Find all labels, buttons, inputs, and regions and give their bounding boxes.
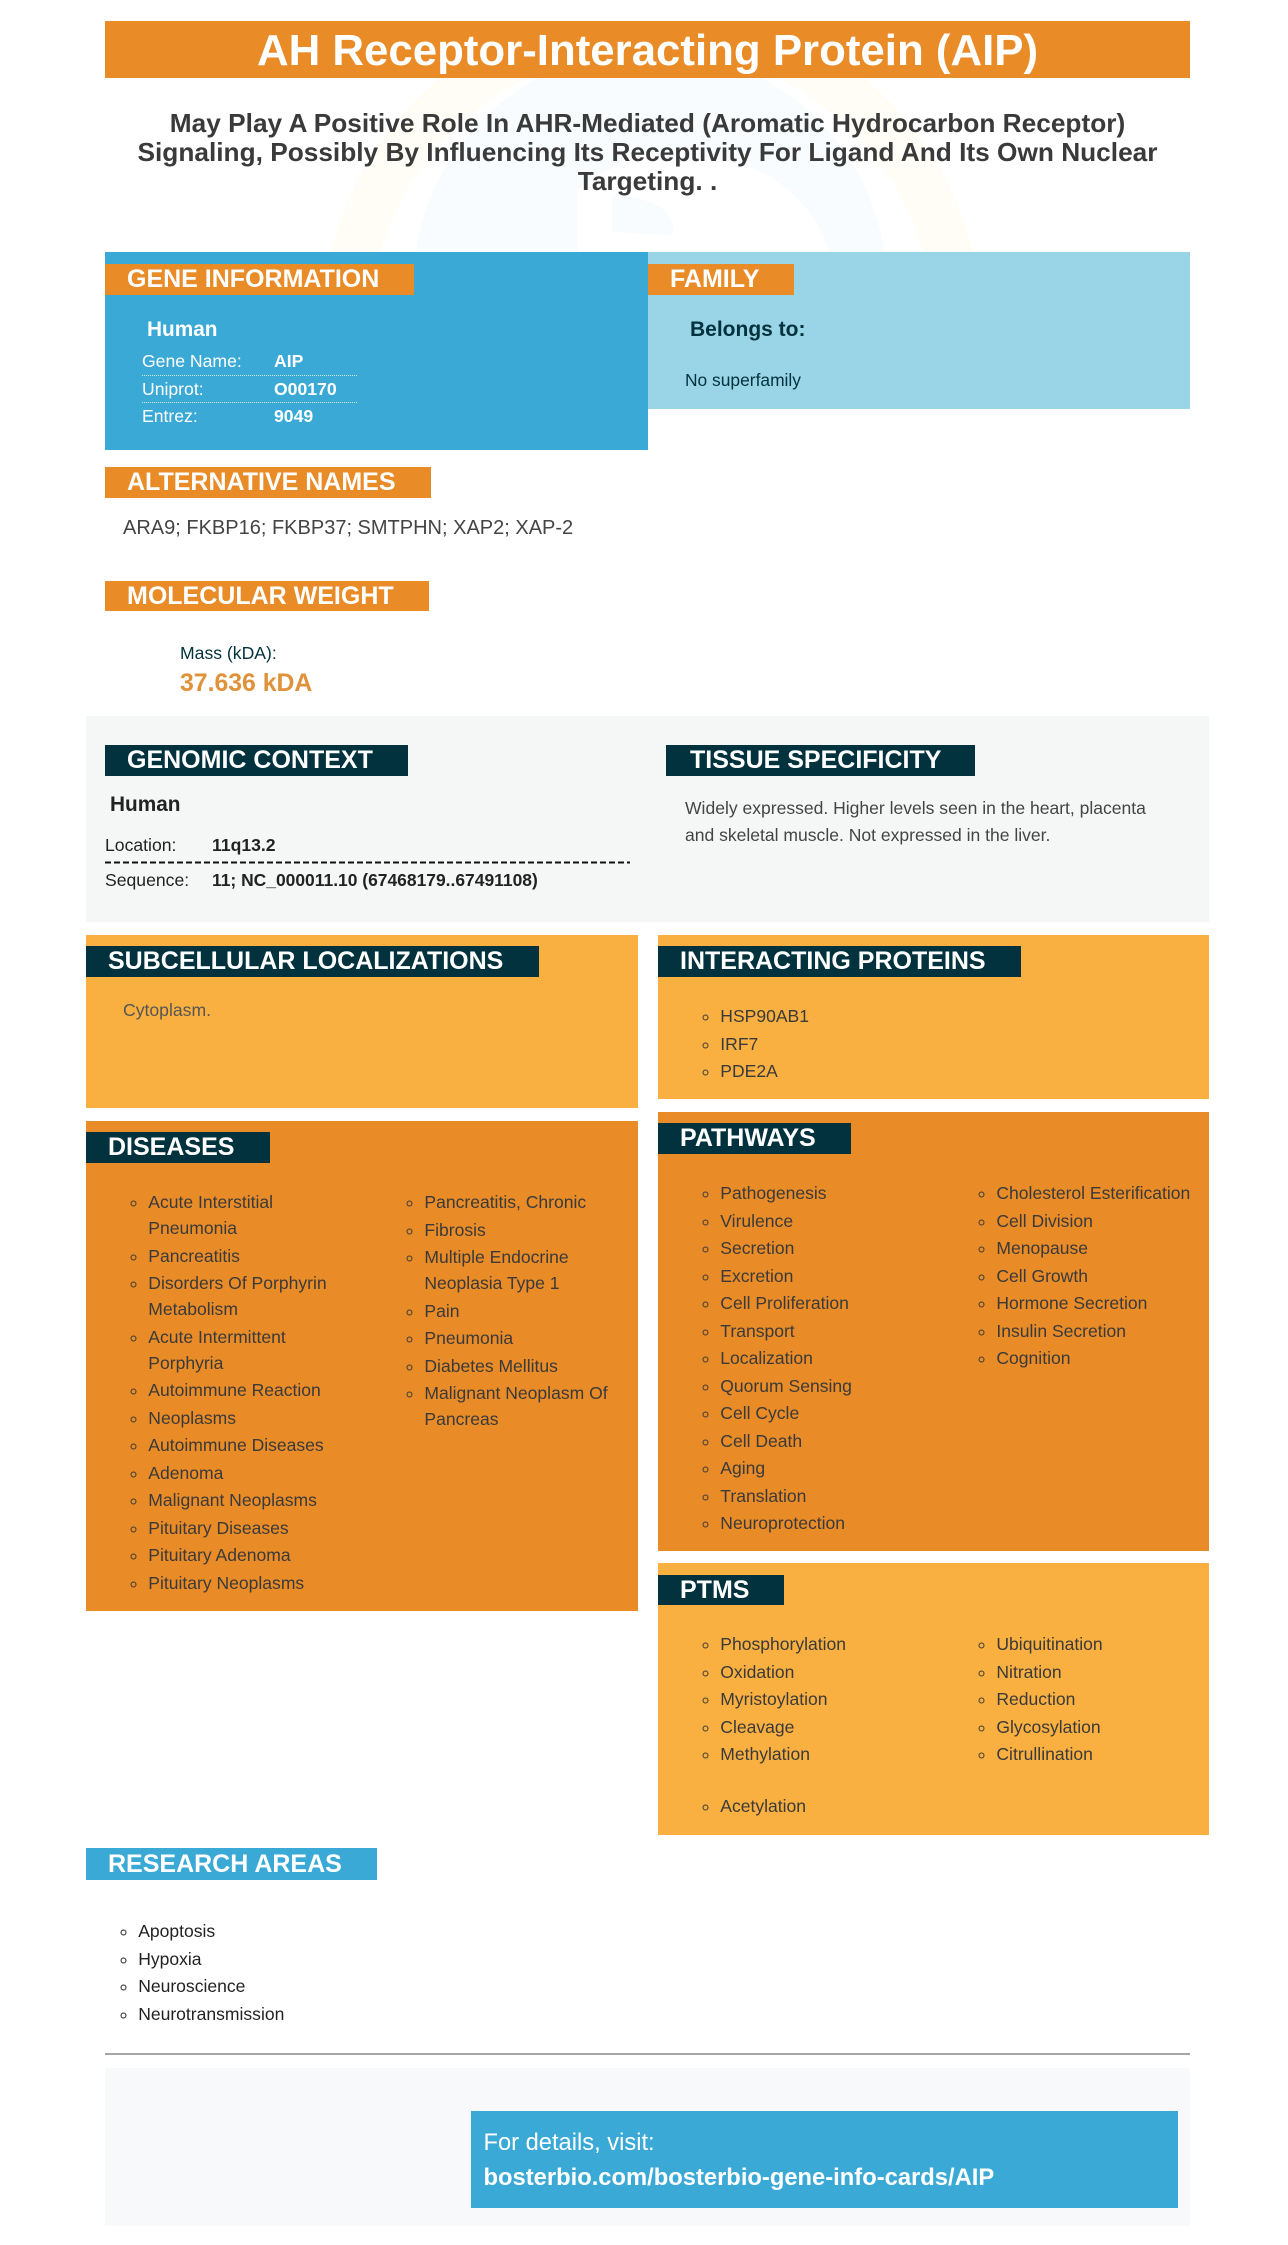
pathways list column 1: Localization	[720, 1348, 813, 1368]
tissue specificity text	[685, 798, 1146, 845]
entrez row: Entrez:	[142, 406, 198, 426]
pathways list column 2: Menopause	[996, 1238, 1088, 1258]
diseases list column 1: Pituitary Neoplasms	[148, 1572, 304, 1592]
ptms list column 1: Myristoylation	[720, 1689, 827, 1709]
ptms list column 2: Nitration	[996, 1662, 1062, 1682]
research areas list: Neuroscience	[138, 1976, 245, 1996]
diseases list column 2: Diabetes Mellitus	[424, 1356, 558, 1376]
panel: diseases	[86, 1121, 638, 1611]
heading: research areas: RESEARCH AREAS	[108, 1850, 342, 1878]
diseases list column 2: Malignant Neoplasm Of	[424, 1383, 608, 1403]
uniprot row: Uniprot:	[142, 379, 204, 399]
ptms list column 1	[702, 1634, 846, 1816]
mass value: 37.636 kDA	[180, 670, 312, 697]
gene name row: AIP	[274, 351, 303, 371]
interacting proteins list: HSP90AB1	[720, 1006, 809, 1026]
ptms list column 1: Oxidation	[720, 1662, 794, 1682]
location row: 11q13.2	[212, 835, 276, 855]
panel: alternative names	[105, 467, 573, 539]
heading: diseases: DISEASES	[108, 1133, 234, 1161]
uniprot row	[142, 376, 357, 403]
pathways list column 2	[978, 1183, 1190, 1368]
ptms list column 2: Reduction	[996, 1689, 1075, 1709]
callout url: bosterbio.com/bosterbio-gene-info-cards/AIP	[484, 2164, 994, 2190]
heading: pathways	[658, 1123, 851, 1154]
alternative names list: ARA9; FKBP16; FKBP37; SMTPHN; XAP2; XAP-2	[123, 517, 573, 539]
heading: pathways: PATHWAYS	[680, 1124, 816, 1152]
panel: research areas	[86, 1848, 377, 2024]
diseases list column 1: Autoimmune Reaction	[148, 1380, 321, 1400]
panel: subcellular localizations	[86, 935, 638, 1108]
panel: molecular weight	[105, 581, 429, 697]
diseases list column 1: Adenoma	[148, 1462, 223, 1482]
subtitle description: May Play A Positive Role In AHR-Mediated (Aromatic Hydrocarbon Receptor)	[170, 108, 1125, 138]
ptms list column 2: Citrullination	[996, 1744, 1093, 1764]
ptms list column 2: Ubiquitination	[996, 1634, 1103, 1654]
background watermark logo	[331, 78, 973, 252]
belongs to label: Belongs to:	[690, 318, 806, 341]
callout label: For details, visit:	[484, 2130, 655, 2156]
ptms list column 1: Phosphorylation	[720, 1634, 846, 1654]
panel: genomic context and tissue specificity	[86, 716, 1209, 922]
diseases list column 1: Pneumonia	[148, 1218, 237, 1238]
gene name row	[142, 348, 357, 376]
ptms list column 2: Glycosylation	[996, 1716, 1101, 1736]
uniprot row: O00170	[274, 379, 337, 399]
panel: family	[648, 252, 1190, 409]
diseases list column 1: Metabolism	[148, 1299, 238, 1319]
research areas list: Neurotransmission	[138, 2004, 284, 2024]
species label: Human	[147, 318, 217, 341]
heading: alternative names: ALTERNATIVE NAMES	[127, 468, 396, 496]
pathways list column 1: Excretion	[720, 1266, 793, 1286]
dashed divider	[105, 862, 630, 864]
research areas list: Apoptosis	[138, 1921, 215, 1941]
panel: gene information	[105, 252, 648, 450]
ptms list column 1: Cleavage	[720, 1716, 794, 1736]
sequence row: Sequence:	[105, 870, 189, 890]
diseases list column 2: Pain	[424, 1300, 459, 1320]
pathways list column 1: Translation	[720, 1486, 806, 1506]
heading: ptms: PTMS	[680, 1576, 749, 1604]
diseases list column 2	[406, 1192, 608, 1429]
sequence row: 11; NC_000011.10 (67468179..67491108)	[212, 870, 538, 890]
pathways list column 2: Cognition	[996, 1348, 1070, 1368]
pathways list column 2: Cell Growth	[996, 1266, 1088, 1286]
pathways list column 1: Cell Death	[720, 1430, 802, 1450]
diseases list column 1: Malignant Neoplasms	[148, 1490, 317, 1510]
interacting proteins list: IRF7	[720, 1034, 758, 1054]
diseases list column 2: Multiple Endocrine	[424, 1247, 569, 1267]
pathways list column 1: Neuroprotection	[720, 1513, 845, 1533]
location row: Location:	[105, 835, 176, 855]
heading: genomic context: GENOMIC CONTEXT	[127, 746, 373, 774]
pathways list column 2: Hormone Secretion	[996, 1293, 1147, 1313]
pathways list column 1: Virulence	[720, 1210, 793, 1230]
diseases list column 1: Neoplasms	[148, 1408, 236, 1428]
panel: pathways	[658, 1112, 1209, 1551]
heading: gene information: GENE INFORMATION	[127, 265, 379, 293]
footer divider	[105, 2053, 1190, 2055]
pathways list column 1: Aging	[720, 1458, 765, 1478]
ptms list column 2	[978, 1634, 1103, 1764]
subtitle description: Signaling, Possibly By Influencing Its Receptivity For Ligand And Its Own Nuclear	[137, 137, 1158, 167]
entrez row	[142, 406, 313, 426]
pathways list column 1	[702, 1183, 852, 1533]
panel: ptms	[658, 1563, 1209, 1835]
pathways list column 1: Cell Cycle	[720, 1403, 799, 1423]
pathways list column 1: Quorum Sensing	[720, 1376, 852, 1396]
diseases list column 1: Porphyria	[148, 1352, 223, 1372]
heading: subcellular localizations: SUBCELLULAR LOCALIZATIONS	[108, 947, 503, 975]
pathways list column 2: Insulin Secretion	[996, 1320, 1126, 1340]
interacting proteins list: PDE2A	[720, 1061, 778, 1081]
heading: interacting proteins: INTERACTING PROTEINS	[680, 947, 986, 975]
subtitle description: Targeting. .	[578, 166, 717, 196]
ptms list column 1: Acetylation	[720, 1796, 806, 1816]
diseases list column 1: Autoimmune Diseases	[148, 1435, 324, 1455]
family value: No superfamily	[685, 370, 801, 390]
title	[105, 21, 1190, 78]
pathways list column 2: Cholesterol Esterification	[996, 1183, 1190, 1203]
diseases list column 2: Pancreas	[424, 1409, 498, 1429]
diseases list column 2: Pancreatitis, Chronic	[424, 1192, 586, 1212]
diseases list column 1: Acute Intermittent	[148, 1326, 286, 1346]
subtitle description	[137, 108, 1158, 196]
species label: Human	[110, 793, 180, 816]
tissue specificity text: Widely expressed. Higher levels seen in the heart, placenta	[685, 798, 1146, 818]
pathways list column 1: Transport	[720, 1320, 795, 1340]
pathways list column 2: Cell Division	[996, 1210, 1093, 1230]
research areas list: Hypoxia	[138, 1948, 202, 1968]
interacting proteins list	[702, 1006, 809, 1081]
tissue specificity text: and skeletal muscle. Not expressed in the liver.	[685, 825, 1050, 845]
heading: diseases	[86, 1132, 270, 1163]
diseases list column 1: Pituitary Adenoma	[148, 1545, 291, 1565]
research areas list	[120, 1921, 284, 2024]
diseases list column 1: Disorders Of Porphyrin	[148, 1273, 327, 1293]
heading: family	[648, 264, 794, 295]
pathways list column 1: Secretion	[720, 1238, 794, 1258]
heading: family: FAMILY	[670, 265, 759, 293]
diseases list column 2: Neoplasia Type 1	[424, 1273, 560, 1293]
gene name row: Gene Name:	[142, 351, 242, 371]
callout: details link	[471, 2111, 1178, 2208]
diseases list column 1: Acute Interstitial	[148, 1192, 273, 1212]
panel: interacting proteins	[658, 935, 1209, 1099]
diseases list column 2: Fibrosis	[424, 1220, 486, 1240]
location row	[105, 835, 276, 855]
pathways list column 1: Cell Proliferation	[720, 1293, 849, 1313]
diseases list column 1: Pancreatitis	[148, 1246, 240, 1266]
heading: ptms	[658, 1575, 784, 1605]
localization text: Cytoplasm.	[123, 1000, 211, 1020]
mass label: Mass (kDA):	[180, 643, 277, 663]
pathways list column 1: Pathogenesis	[720, 1183, 827, 1203]
heading: tissue specificity: TISSUE SPECIFICITY	[690, 746, 941, 774]
entrez row: 9049	[274, 406, 313, 426]
diseases list column 1: Pituitary Diseases	[148, 1518, 289, 1538]
diseases list column 1	[130, 1192, 327, 1592]
panel: footer	[105, 2068, 1190, 2226]
diseases list column 2: Pneumonia	[424, 1328, 513, 1348]
ptms list column 1: Methylation	[720, 1744, 810, 1764]
title: AH Receptor-Interacting Protein (AIP)	[257, 26, 1038, 75]
heading: molecular weight: MOLECULAR WEIGHT	[127, 582, 394, 610]
